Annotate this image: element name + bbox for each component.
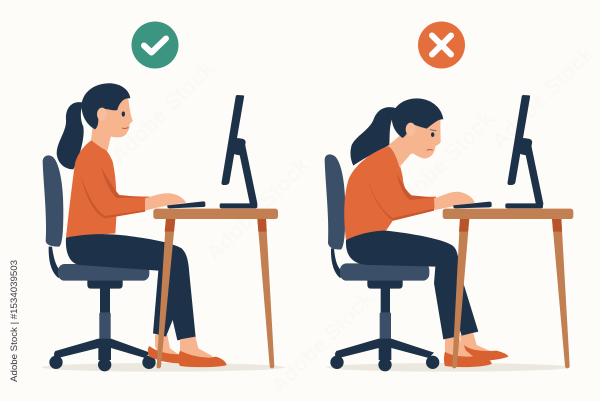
panel: correct posture	[42, 83, 285, 372]
office chair	[325, 154, 439, 371]
ear	[97, 108, 107, 121]
eye and brow	[430, 130, 436, 137]
trousers	[346, 231, 478, 339]
mouth	[122, 127, 128, 129]
front shoe	[444, 352, 492, 367]
neck	[388, 135, 417, 167]
monitor	[220, 95, 257, 208]
office chair	[43, 155, 156, 371]
head	[398, 117, 441, 158]
arm sweater	[365, 167, 436, 221]
icon: green check	[132, 22, 178, 68]
desk	[153, 209, 278, 368]
hair	[82, 83, 130, 129]
keyboard	[167, 201, 205, 208]
faint stock watermarks: Adobe Stock	[266, 285, 379, 399]
back foot and shoe	[148, 335, 179, 363]
mouth	[427, 148, 433, 152]
ponytail	[350, 107, 397, 166]
monitor	[505, 95, 543, 208]
faint stock watermarks	[106, 40, 599, 399]
faint stock watermarks: Adobe Stock	[201, 152, 314, 266]
torso sweater	[344, 146, 410, 240]
hand	[145, 193, 186, 211]
torso sweater	[66, 140, 117, 237]
head	[93, 93, 133, 137]
ponytail	[57, 102, 84, 169]
hair	[392, 98, 443, 138]
floor shadow	[327, 363, 570, 372]
front foot and shoe	[445, 337, 473, 360]
arm sweater	[80, 164, 150, 218]
side stock id text: Adobe Stock | #1534039503	[9, 260, 20, 382]
icon: orange cross	[418, 22, 465, 68]
faint stock watermarks: Adobe Stock	[106, 55, 219, 169]
faint stock watermarks: Adobe Stock	[386, 105, 499, 219]
desk	[443, 209, 573, 368]
hand	[434, 192, 475, 210]
trousers	[66, 234, 196, 340]
panel: incorrect posture	[325, 95, 573, 372]
front foot and shoe	[178, 337, 227, 367]
eye	[122, 111, 125, 117]
ear	[406, 123, 416, 136]
neck	[91, 120, 112, 151]
faint stock watermarks: Adobe Stock	[486, 40, 599, 154]
back foot and shoe	[460, 333, 508, 361]
floor shadow	[42, 363, 285, 372]
keyboard	[453, 202, 492, 208]
